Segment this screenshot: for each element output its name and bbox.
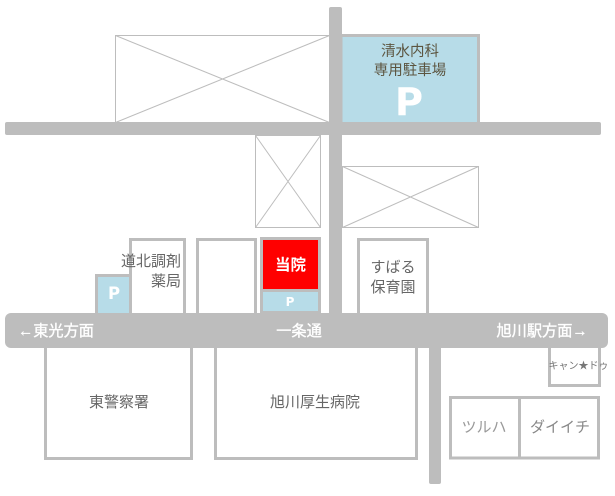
block: centre crossed lot (256, 136, 320, 228)
road: Ichijo street (5, 313, 608, 348)
road: lower vertical (429, 345, 441, 484)
building: nursery (358, 240, 428, 316)
direction label: west: ←東光方面 (18, 323, 94, 340)
nursery label: 保育園 (370, 279, 416, 296)
nursery label: すばる (370, 259, 416, 276)
building: hospital (216, 344, 416, 458)
parking label: 専用駐車場 (374, 62, 446, 79)
daiichi label: ダイイチ (530, 419, 590, 436)
building: tsuruha (450, 398, 520, 458)
road: upper horizontal (5, 122, 601, 135)
block: upper left crossed lot (116, 36, 330, 122)
building: clinic (262, 238, 320, 314)
building: candou (548, 344, 608, 386)
clinic label: 当院 (275, 256, 306, 274)
icon: parking P: P (395, 80, 423, 125)
road: central vertical (329, 7, 342, 317)
police label: 東警察署 (89, 394, 149, 411)
pharmacy label: 道北調剤 (121, 253, 181, 270)
parking label: 清水内科 (381, 43, 439, 60)
pharmacy label: 薬局 (151, 273, 181, 290)
building: daiichi (520, 398, 598, 458)
icon: parking P: P (108, 284, 120, 303)
building: police station (46, 344, 192, 458)
icon: parking P: P (286, 295, 295, 309)
building: pharmacy parking (96, 276, 130, 316)
street name: 一条通 (276, 323, 322, 340)
panel: dedicated parking (341, 36, 478, 125)
tsuruha label: ツルハ (461, 419, 507, 436)
hospital label: 旭川厚生病院 (270, 394, 360, 411)
building: blank lot (198, 240, 256, 316)
building: pharmacy (121, 240, 184, 316)
direction label: east: 旭川駅方面→ (496, 323, 588, 340)
block: right crossed lot (342, 166, 478, 228)
clinic marker (263, 240, 318, 289)
clinic parking (263, 292, 318, 311)
candou label: キャン★ドゥ (548, 361, 608, 372)
